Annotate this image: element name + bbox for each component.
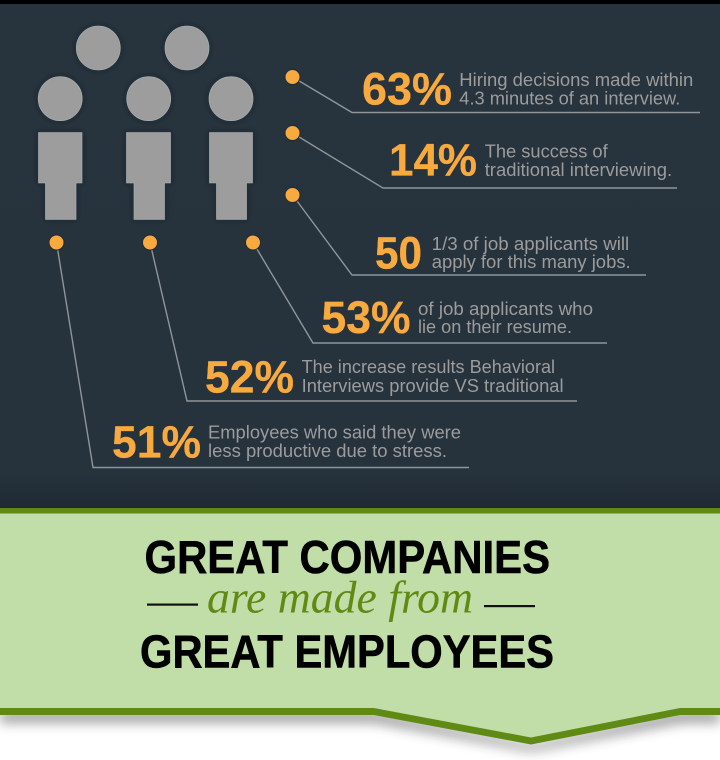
icon: left person [38, 77, 82, 220]
banner: green ribbon [0, 508, 720, 744]
callout: 50: apply for this many jobs. [432, 251, 631, 272]
dark background panel [0, 4, 720, 508]
callout: 52% [142, 235, 577, 402]
heading: great companies: GREAT COMPANIES [144, 531, 550, 583]
callout: 50: 50 [375, 227, 422, 278]
banner drop shadow [0, 712, 720, 751]
heading: great employees: GREAT EMPLOYEES [140, 626, 554, 678]
callout: 52%: 52% [205, 351, 294, 402]
callout: 63%: 4.3 minutes of an interview. [459, 87, 680, 108]
divider right [484, 605, 535, 607]
callout: 50: 1/3 of job applicants will [432, 233, 629, 254]
callout: 53%: 53% [322, 292, 410, 343]
callout: 52%: Interviews provide VS traditional [302, 375, 564, 396]
callout: 50 [285, 188, 646, 278]
callout: 14%: traditional interviewing. [485, 159, 672, 180]
callout: 63% [285, 64, 700, 114]
icon: right person [209, 77, 253, 220]
callout: 63%: Hiring decisions made within [459, 69, 693, 90]
icon: middle person [126, 77, 171, 220]
callout: 51%: 51% [112, 417, 201, 468]
callout: 53% [246, 235, 607, 343]
icon: group of people [38, 26, 253, 220]
callout: 53%: of job applicants who [418, 298, 593, 319]
callout: 52%: The increase results Behavioral [302, 356, 555, 377]
top black band [0, 0, 720, 4]
callout: 63%: 63% [362, 64, 452, 114]
icon: back left head [76, 26, 120, 70]
callout: 51%: Employees who said they were [208, 421, 461, 442]
divider left [147, 604, 198, 606]
callout: 14%: The success of [485, 140, 609, 161]
callout: 53%: lie on their resume. [418, 316, 572, 337]
callout: 51% [49, 235, 469, 468]
callout: 51%: less productive due to stress. [208, 440, 447, 461]
callout: 14% [285, 126, 677, 188]
heading: are made from: are made from [207, 572, 473, 622]
callout: 14%: 14% [389, 134, 477, 186]
icon: back right head [165, 26, 209, 70]
